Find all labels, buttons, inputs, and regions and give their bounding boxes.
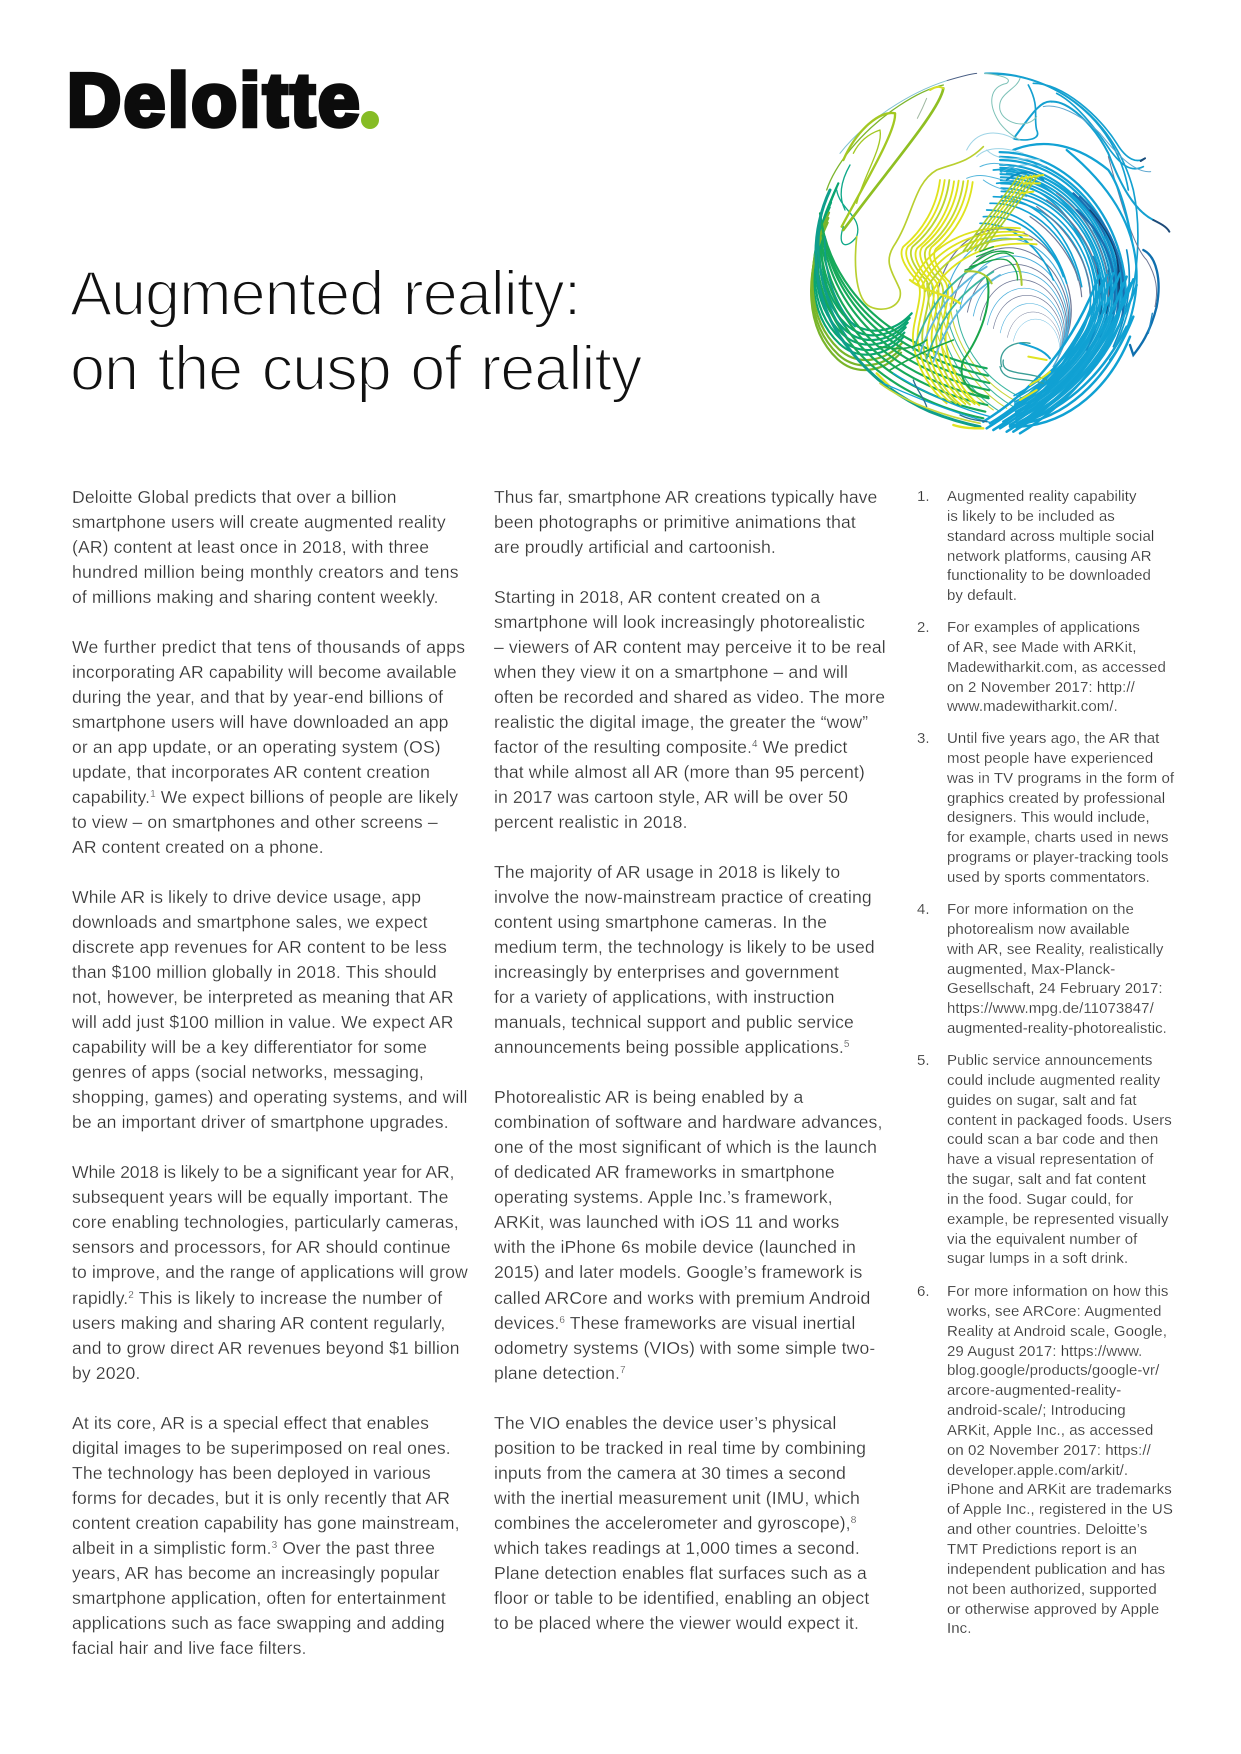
footnote 1 (917, 488, 1154, 604)
footnote 6: TMT Predictions report is an (947, 1541, 1137, 1558)
paragraph 2 (72, 637, 465, 857)
footnote 5 (917, 1052, 1172, 1267)
paragraph 9: devices.6 These frameworks are visual inertial (494, 1313, 855, 1333)
paragraph 10: which takes readings at 1,000 times a second. (494, 1538, 860, 1558)
paragraph 5: smartphone application, often for entertainment (72, 1588, 446, 1608)
paragraph 10: floor or table to be identified, enabling an object (494, 1588, 869, 1608)
footnote 6: and other countries. Deloitte’s (947, 1521, 1147, 1538)
footnote 5: Public service announcements (947, 1052, 1152, 1069)
paragraph 5: The technology has been deployed in various (72, 1463, 431, 1483)
footnote 5: sugar lumps in a soft drink. (947, 1250, 1128, 1267)
footnote 2: www.madewitharkit.com/. (947, 698, 1118, 715)
paragraph 3: downloads and smartphone sales, we expect (72, 912, 428, 932)
top thin teal strands (947, 73, 1047, 197)
footnote 3: designers. This would include, (947, 809, 1150, 826)
paragraph 1: of millions making and sharing content weekly. (72, 587, 439, 607)
footnote 6: developer.apple.com/arkit/. (947, 1462, 1128, 1479)
outer top tails (985, 73, 1169, 355)
footnote 4 (917, 901, 1167, 1037)
paragraph 5: content creation capability has gone mainstream, (72, 1513, 460, 1533)
footnote 3: most people have experienced (947, 750, 1153, 767)
green inner strands (962, 247, 1050, 400)
paragraph 9: plane detection.7 (494, 1363, 626, 1383)
yellow bundle (902, 180, 1037, 405)
paragraph 8: increasingly by enterprises and government (494, 962, 839, 982)
paragraph 10: inputs from the camera at 30 times a second (494, 1463, 846, 1483)
paragraph 2: smartphone users will have downloaded an app (72, 712, 448, 732)
paragraph 9: one of the most significant of which is the launch (494, 1137, 877, 1157)
footnote 1: functionality to be downloaded (947, 567, 1151, 584)
paragraph 2: to view – on smartphones and other screens – (72, 812, 438, 832)
paragraph 4: users making and sharing AR content regularly, (72, 1313, 445, 1333)
footnote 2: For examples of applications (947, 619, 1140, 636)
footnote 1: 1. (917, 488, 930, 505)
footnote 5: guides on sugar, salt and fat (947, 1092, 1137, 1109)
paragraph 3: will add just $100 million in value. We expect AR (72, 1012, 454, 1032)
footnote 6: ARKit, Apple Inc., as accessed (947, 1422, 1153, 1439)
paragraph 1: (AR) content at least once in 2018, with three (72, 537, 429, 557)
lime diagonal strands (963, 175, 1043, 251)
footnote 6: android-scale/; Introducing (947, 1402, 1126, 1419)
column 2 (494, 487, 886, 1633)
paragraph 3: than $100 million globally in 2018. This should (72, 962, 437, 982)
logo: Deloitte (67, 58, 379, 142)
footnote 1: standard across multiple social (947, 528, 1154, 545)
footnote 6: of Apple Inc., registered in the US (947, 1501, 1173, 1518)
paragraph 2: or an app update, or an operating system (OS) (72, 737, 441, 757)
footnote 6: iPhone and ARKit are trademarks (947, 1481, 1172, 1498)
paragraph 10: with the inertial measurement unit (IMU, which (494, 1488, 860, 1508)
footnote 1: is likely to be included as (947, 508, 1115, 525)
paragraph 9: 2015) and later models. Google’s framework is (494, 1262, 862, 1282)
title (70, 259, 641, 404)
footnote 2: Madewitharkit.com, as accessed (947, 659, 1166, 676)
paragraph 7: factor of the resulting composite.4 We predict (494, 737, 848, 757)
footnote 3: used by sports commentators. (947, 869, 1150, 886)
paragraph 4: rapidly.2 This is likely to increase the number of (72, 1288, 442, 1308)
paragraph 3: not, however, be interpreted as meaning that AR (72, 987, 454, 1007)
paragraph 7: realistic the digital image, the greater the “wow” (494, 712, 868, 732)
paragraph 4: subsequent years will be equally important. The (72, 1187, 448, 1207)
footnote 4: augmented-reality-photorealistic. (947, 1020, 1167, 1037)
paragraph 9: combination of software and hardware advances, (494, 1112, 882, 1132)
footnote 5: the sugar, salt and fat content (947, 1171, 1146, 1188)
footnote 6: works, see ARCore: Augmented (947, 1303, 1162, 1320)
footnote 1: network platforms, causing AR (947, 548, 1152, 565)
paragraph 6: are proudly artificial and cartoonish. (494, 537, 776, 557)
paragraph 9 (494, 1087, 882, 1383)
paragraph 3: discrete app revenues for AR content to be less (72, 937, 447, 957)
footnote 6: or otherwise approved by Apple (947, 1600, 1159, 1618)
title: on the cusp of reality (70, 334, 641, 404)
paragraph 8: announcements being possible applications.5 (494, 1037, 850, 1057)
column 1 (72, 487, 468, 1658)
footnote 6: not been authorized, supported (947, 1581, 1157, 1598)
paragraph 8: content using smartphone cameras. In the (494, 912, 827, 932)
paragraph 4: to improve, and the range of applications will grow (72, 1262, 468, 1282)
footnote 1: Augmented reality capability (947, 488, 1137, 505)
footnote 3: graphics created by professional (947, 790, 1165, 807)
footnote 4: photorealism now available (947, 921, 1130, 938)
footnote 4: 4. (917, 901, 930, 918)
paragraph 10 (494, 1413, 870, 1633)
paragraph 9: of dedicated AR frameworks in smartphone (494, 1162, 835, 1182)
paragraph 5: albeit in a simplistic form.3 Over the past three (72, 1538, 435, 1558)
paragraph 4: While 2018 is likely to be a significant year for AR, (72, 1162, 454, 1182)
paragraph 1: smartphone users will create augmented reality (72, 512, 446, 532)
paragraph 5: facial hair and live face filters. (72, 1638, 307, 1658)
bottom tangle (877, 280, 993, 428)
left green bundle (811, 165, 989, 427)
paragraph 9: odometry systems (VIOs) with some simple two- (494, 1338, 875, 1358)
paragraph 10: combines the accelerometer and gyroscope),8 (494, 1513, 856, 1533)
paragraph 7: percent realistic in 2018. (494, 812, 688, 832)
footnote 4: For more information on the (947, 901, 1134, 918)
footnote 5: example, be represented visually (947, 1211, 1169, 1228)
paragraph 7: Starting in 2018, AR content created on a (494, 587, 820, 607)
paragraph 9: operating systems. Apple Inc.’s framework, (494, 1187, 833, 1207)
paragraph 5: At its core, AR is a special effect that enables (72, 1413, 429, 1433)
paragraph 7: often be recorded and shared as video. The more (494, 687, 885, 707)
paragraph 8: for a variety of applications, with instruction (494, 987, 835, 1007)
paragraph 3: shopping, games) and operating systems, and will (72, 1087, 468, 1107)
paragraph 10: The VIO enables the device user’s physical (494, 1413, 836, 1433)
footnote 3: programs or player-tracking tools (947, 849, 1169, 866)
footnote 6: arcore-augmented-reality- (947, 1382, 1121, 1399)
paragraph 7: that while almost all AR (more than 95 percent) (494, 762, 865, 782)
footnote 4: augmented, Max-Planck- (947, 961, 1115, 978)
paragraph 8: medium term, the technology is likely to be used (494, 937, 875, 957)
footnote 5: could scan a bar code and then (947, 1131, 1158, 1148)
footnote 6: 29 August 2017: https://www. (947, 1343, 1142, 1360)
paragraph 6 (494, 487, 877, 557)
dark blue right strands (1067, 150, 1137, 360)
paragraph 4: sensors and processors, for AR should continue (72, 1237, 451, 1257)
paragraph 7 (494, 587, 886, 832)
footnote 5: have a visual representation of (947, 1151, 1153, 1168)
footnote 3: 3. (917, 730, 930, 747)
paragraph 9: Photorealistic AR is being enabled by a (494, 1087, 803, 1107)
lower right dense blue (983, 273, 1137, 433)
paragraph 6: been photographs or primitive animations that (494, 512, 856, 532)
paragraph 9: ARKit, was launched with iOS 11 and works (494, 1212, 839, 1232)
paragraph 8: The majority of AR usage in 2018 is likely to (494, 862, 840, 882)
paragraph 7: when they view it on a smartphone – and will (494, 662, 848, 682)
paragraph 4 (72, 1162, 468, 1383)
paragraph 10: to be placed where the viewer would expect it. (494, 1613, 859, 1633)
footnote 5: content in packaged foods. Users (947, 1112, 1172, 1129)
footnote 3: was in TV programs in the form of (947, 770, 1174, 787)
paragraph 5: applications such as face swapping and adding (72, 1613, 445, 1633)
paragraph 5: digital images to be superimposed on real ones. (72, 1438, 451, 1458)
footnote 5: could include augmented reality (947, 1072, 1160, 1089)
paragraph 3: be an important driver of smartphone upgrades. (72, 1112, 449, 1132)
paragraph 3: capability will be a key differentiator for some (72, 1037, 427, 1057)
paragraph 5 (72, 1413, 460, 1658)
footnote 6: 6. (917, 1283, 930, 1300)
paragraph 10: position to be tracked in real time by combining (494, 1438, 866, 1458)
footnote 2: of AR, see Made with ARKit, (947, 639, 1136, 656)
paragraph 2: during the year, and that by year-end billions of (72, 687, 443, 707)
footnote 5: 5. (917, 1052, 930, 1069)
paragraph 10: Plane detection enables flat surfaces such as a (494, 1563, 867, 1583)
paragraph 2: incorporating AR capability will become available (72, 662, 457, 682)
footnote 4: Gesellschaft, 24 February 2017: (947, 980, 1163, 997)
paragraph 9: called ARCore and works with premium Android (494, 1288, 870, 1308)
illustration: globe of flowing lines (810, 72, 1170, 435)
title: Augmented reality: (70, 259, 580, 329)
inner thin arcs (927, 229, 1071, 412)
footnote 3: Until five years ago, the AR that (947, 730, 1159, 747)
paragraph 3: While AR is likely to drive device usage, app (72, 887, 421, 907)
paragraph 1 (72, 487, 459, 607)
paragraph 1: Deloitte Global predicts that over a billion (72, 487, 397, 507)
footnote 6: Reality at Android scale, Google, (947, 1323, 1167, 1340)
footnote 6: blog.google/products/google-vr/ (947, 1362, 1159, 1379)
paragraph 8: manuals, technical support and public service (494, 1012, 854, 1032)
footnote 6: Inc. (947, 1620, 971, 1637)
paragraph 3: genres of apps (social networks, messaging, (72, 1062, 424, 1082)
footnote 2: on 2 November 2017: http:// (947, 679, 1135, 696)
footnote 6: on 02 November 2017: https:// (947, 1442, 1151, 1459)
paragraph 2: capability.1 We expect billions of people are likely (72, 787, 458, 807)
logo green dot (361, 111, 379, 129)
paragraph 8 (494, 862, 875, 1057)
paragraph 9: with the iPhone 6s mobile device (launched in (494, 1237, 856, 1257)
paragraph 3 (72, 887, 468, 1132)
blue arc family (980, 152, 1126, 429)
paragraph 6: Thus far, smartphone AR creations typically have (494, 487, 877, 507)
paragraph 7: smartphone will look increasingly photorealistic (494, 612, 865, 632)
paragraph 2: update, that incorporates AR content creation (72, 762, 430, 782)
footnote 3 (917, 730, 1174, 886)
top left lime loops (827, 81, 983, 309)
paragraph 2: AR content created on a phone. (72, 837, 324, 857)
footnote 1: by default. (947, 587, 1017, 604)
paragraph 2: We further predict that tens of thousands of apps (72, 637, 465, 657)
footnote 6: For more information on how this (947, 1283, 1168, 1300)
footnote 5: via the equivalent number of (947, 1231, 1137, 1248)
footnote 2: 2. (917, 619, 930, 636)
footnote 4: with AR, see Reality, realistically (947, 941, 1163, 958)
paragraph 7: in 2017 was cartoon style, AR will be over 50 (494, 787, 848, 807)
footnote 6 (917, 1283, 1173, 1637)
paragraph 1: hundred million being monthly creators and tens (72, 562, 459, 582)
paragraph 4: core enabling technologies, particularly cameras, (72, 1212, 459, 1232)
paragraph 5: years, AR has become an increasingly popular (72, 1563, 440, 1583)
footnote 3: for example, charts used in news (947, 829, 1169, 846)
paragraph 4: and to grow direct AR revenues beyond $1 billion (72, 1338, 460, 1358)
footnote 4: https://www.mpg.de/11073847/ (947, 1000, 1154, 1017)
paragraph 5: forms for decades, but it is only recently that AR (72, 1488, 450, 1508)
paragraph 4: by 2020. (72, 1363, 140, 1383)
footnote 6: independent publication and has (947, 1561, 1165, 1578)
paragraph 7: – viewers of AR content may perceive it to be real (494, 637, 886, 657)
logo wordmark: Deloitte (67, 58, 362, 142)
footnote 2 (917, 619, 1166, 715)
footnote 5: in the food. Sugar could, for (947, 1191, 1133, 1208)
paragraph 8: involve the now-mainstream practice of creating (494, 887, 872, 907)
